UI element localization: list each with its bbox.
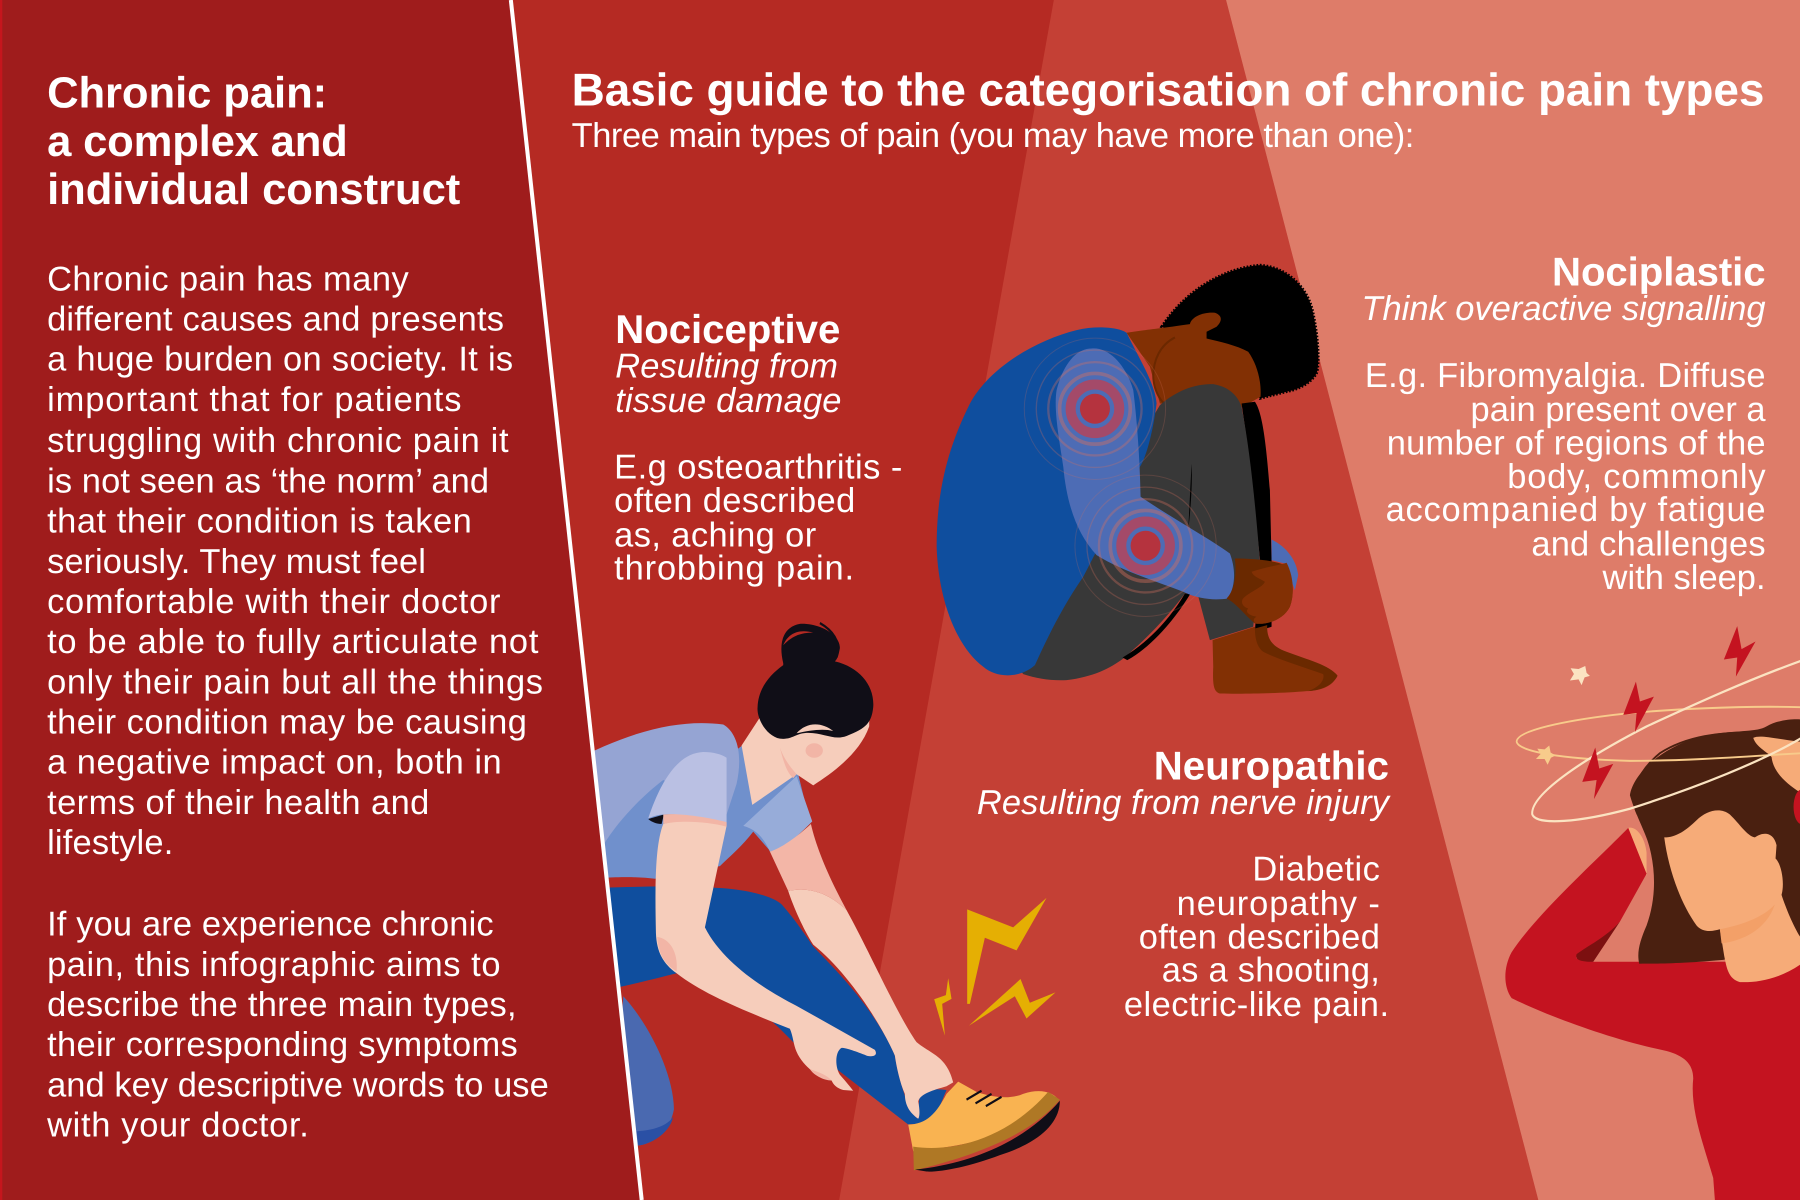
text block: neuropathic: Resulting from nerve injury: [977, 784, 1391, 822]
heading: chronic pain: individual construct: [47, 166, 461, 215]
illustration: woman holding her leg with shooting pain: [567, 623, 1060, 1172]
text block: nociplastic: with sleep.: [1601, 559, 1766, 597]
text block: neuropathic: electric-like pain.: [1124, 986, 1389, 1024]
text block: chronic pain description: their corresponding symptoms: [47, 1026, 518, 1064]
heading: chronic pain: [47, 70, 461, 215]
text block: chronic pain description: [46, 260, 549, 1145]
text block: chronic pain description: terms of their health and: [47, 784, 429, 822]
text block: nociceptive: often described: [614, 482, 855, 520]
text block: neuropathic: as a shooting,: [1162, 952, 1380, 990]
text block: nociceptive: throbbing pain.: [614, 550, 854, 588]
text block: chronic pain description: that their condition is taken: [47, 503, 472, 541]
heading: chronic pain: Chronic pain:: [47, 70, 327, 118]
illustration: woman holding her head with dizziness: [1505, 626, 1800, 1200]
text block: nociplastic: body, commonly: [1507, 458, 1766, 496]
heading: basic guide: Basic guide to the categorisation of chronic pain types: [572, 65, 1764, 116]
text block: chronic pain description: different causes and presents: [47, 301, 504, 339]
text block: chronic pain description: seriously. They must feel: [47, 543, 426, 581]
text block: nociceptive: E.g osteoarthritis -: [614, 449, 902, 487]
text block: nociceptive: tissue damage: [615, 382, 841, 420]
text block: chronic pain description: If you are experience chronic: [47, 906, 494, 944]
text block: chronic pain description: to be able to fully articulate not: [47, 623, 539, 661]
text block: nociplastic: accompanied by fatigue: [1386, 491, 1766, 529]
panel: left column background: [0, 0, 642, 1200]
icon: clasped hand: [1227, 558, 1293, 624]
text block: nociplastic: [1361, 250, 1766, 597]
text block: chronic pain description: their condition may be causing: [47, 704, 527, 742]
text block: neuropathic: Diabetic: [1252, 851, 1380, 889]
text block: neuropathic: often described: [1139, 918, 1380, 956]
text block: chronic pain description: comfortable with their doctor: [47, 583, 501, 621]
text block: chronic pain description: Chronic pain has many: [47, 260, 409, 298]
text block: nociplastic: and challenges: [1531, 526, 1766, 564]
text block: nociceptive: [614, 308, 902, 588]
text block: neuropathic: neuropathy -: [1177, 885, 1380, 923]
icon: stars: [1536, 666, 1590, 765]
text block: chronic pain description: and key descriptive words to use: [47, 1067, 549, 1104]
text block: chronic pain description: describe the three main types,: [47, 986, 517, 1024]
text block: chronic pain description: a huge burden on society. It is: [47, 341, 513, 379]
text block: chronic pain description: is not seen as ‘the norm’ and: [47, 463, 489, 500]
text block: nociplastic: E.g. Fibromyalgia. Diffuse: [1365, 357, 1766, 395]
illustration: person hugging knees with pain rings: [937, 265, 1338, 694]
text block: nociplastic: Think overactive signalling: [1361, 290, 1766, 328]
text block: nociplastic: Nociplastic: [1552, 250, 1766, 295]
text block: chronic pain description: struggling with chronic pain it: [47, 422, 509, 460]
text block: nociceptive: Nociceptive: [615, 308, 840, 352]
icon: pain rings at shoulder: [1024, 338, 1166, 479]
text block: nociceptive: Resulting from: [615, 348, 838, 386]
icon: pain rings at elbow: [1075, 475, 1216, 616]
text block: chronic pain description: only their pain but all the things: [47, 664, 543, 701]
white diagonal divider: [511, 0, 642, 1200]
text block: chronic pain description: pain, this infographic aims to: [47, 946, 501, 984]
text block: nociplastic: number of regions of the: [1387, 425, 1766, 463]
text block: chronic pain description: with your doctor.: [46, 1107, 309, 1145]
icon: red lightning bolts: [1582, 626, 1756, 799]
text block: neuropathic: Neuropathic: [1154, 744, 1389, 789]
subheading: three main types: Three main types of pain (you may have more than one):: [572, 117, 1414, 155]
text block: nociplastic: pain present over a: [1471, 391, 1766, 429]
text block: chronic pain description: important that for patients: [47, 381, 461, 419]
text block: chronic pain description: lifestyle.: [47, 824, 173, 862]
text block: nociceptive: as, aching or: [614, 517, 816, 554]
icon: yellow shoe: [908, 1082, 1060, 1172]
text block: chronic pain description: a negative impact on, both in: [47, 744, 502, 782]
icon: dizziness orbits: [1517, 661, 1800, 821]
heading: chronic pain: a complex and: [47, 118, 348, 166]
text block: neuropathic: [977, 744, 1391, 1024]
icon: yellow lightning bolts: [934, 898, 1056, 1036]
